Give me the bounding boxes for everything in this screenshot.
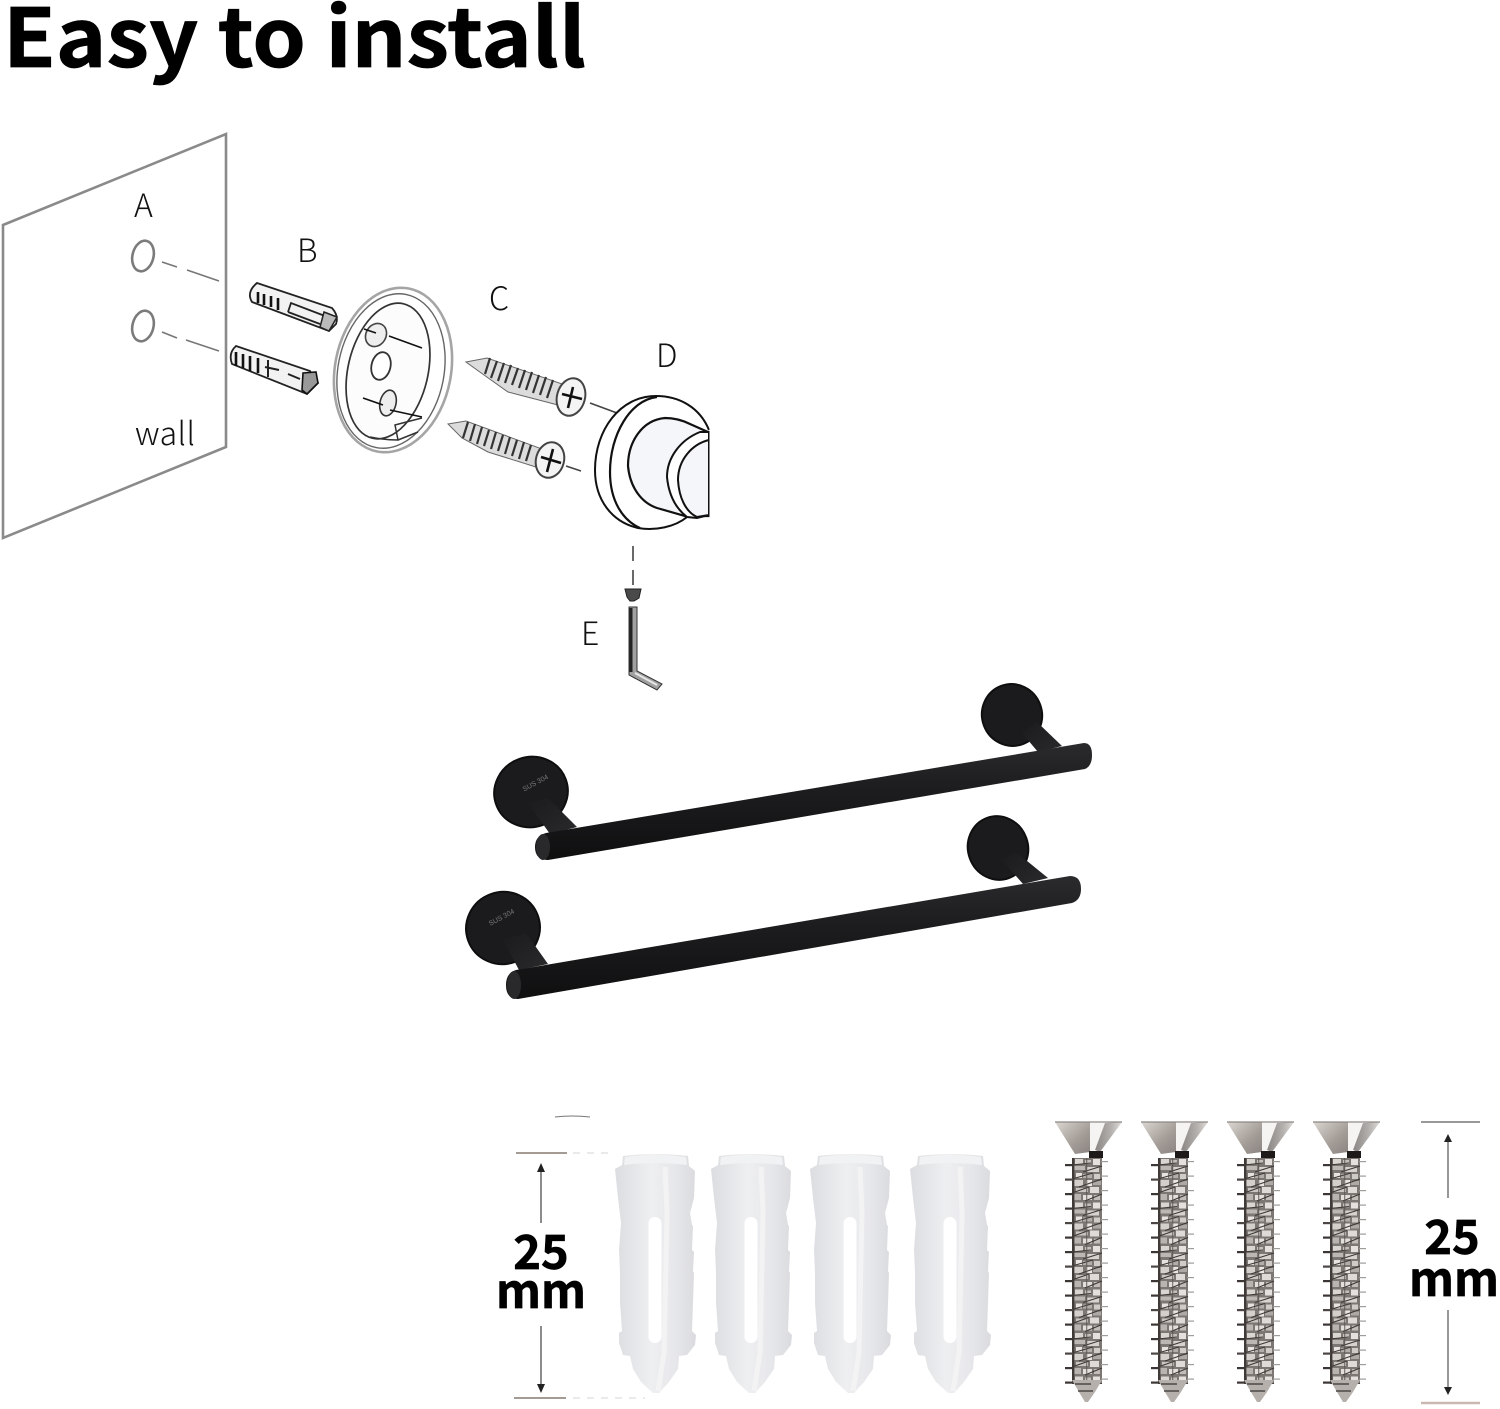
right mount (959, 808, 1037, 888)
wall anchors set (615, 1154, 991, 1393)
screw 1 (1055, 1122, 1122, 1402)
stray mark (555, 1116, 590, 1117)
screw C upper (466, 358, 589, 419)
label: wall: wall (135, 409, 195, 455)
towel bar rear (484, 676, 1092, 860)
anchor 1 (615, 1154, 696, 1393)
wall panel (3, 134, 226, 538)
installation diagram (3, 134, 714, 690)
anchor 3 (810, 1154, 891, 1393)
set screw (625, 589, 641, 601)
bracket base (595, 392, 714, 532)
marking: SUS 304 (522, 774, 550, 793)
right mount (973, 676, 1051, 754)
dimension: screws 25 mm (1409, 1122, 1499, 1403)
screw C lower (448, 421, 568, 481)
wall anchor upper (250, 283, 337, 331)
unit: mm (1409, 1241, 1499, 1310)
bar (535, 743, 1092, 860)
unit: mm (496, 1253, 586, 1322)
screw 4 (1313, 1122, 1380, 1402)
wall hole upper (129, 238, 157, 274)
allen key (629, 607, 662, 690)
label: B: B (297, 226, 318, 272)
wall anchor lower (231, 346, 318, 394)
screw 3 (1227, 1122, 1294, 1402)
marking: SUS 304 (488, 908, 516, 928)
guide lines (162, 262, 219, 351)
dimension: wall anchors 25 mm (496, 1153, 645, 1398)
value: 25 (1424, 1199, 1480, 1268)
towel bar front (456, 808, 1081, 999)
label: A: A (134, 181, 153, 227)
anchor 2 (711, 1154, 792, 1393)
guide lines to bracket (566, 403, 633, 585)
bar (506, 876, 1081, 999)
wall hole lower (129, 308, 157, 344)
label: E: E (581, 609, 599, 655)
anchor 4 (910, 1154, 991, 1393)
label: C: C (489, 274, 509, 320)
screws set (1055, 1122, 1380, 1402)
value: 25 (513, 1214, 569, 1283)
label: D: D (656, 331, 678, 377)
screw 2 (1141, 1122, 1208, 1402)
mounting plate (320, 277, 466, 463)
left mount (456, 882, 550, 974)
left mount (484, 746, 578, 838)
